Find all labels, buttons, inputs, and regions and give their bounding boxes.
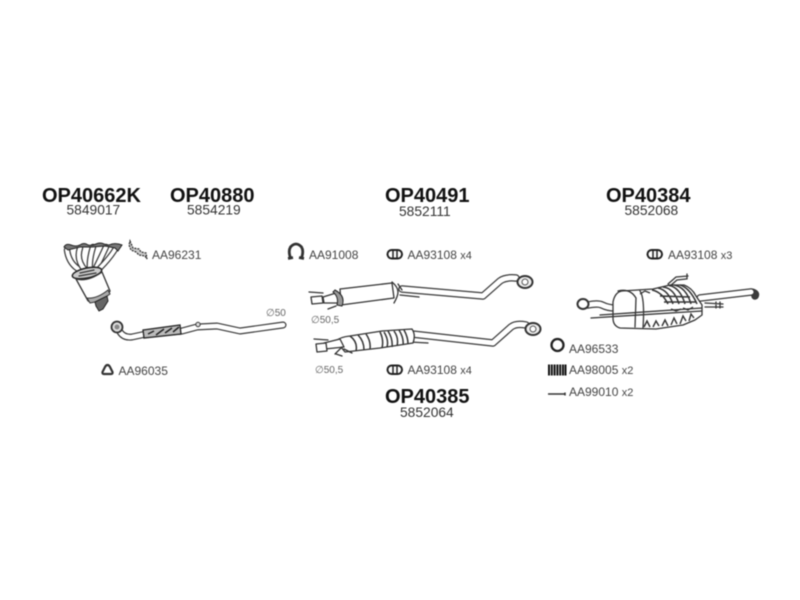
heading: OP40384: 5852068 — [624, 203, 679, 218]
heading: OP40385 — [385, 386, 470, 420]
icon: ring clamp AA93108 lower — [388, 366, 402, 374]
icon: ring clamp AA93108 right — [648, 250, 662, 258]
label: diameter 50,5 upper: ∅50,5 — [311, 315, 340, 326]
icon: spring AA98005 — [549, 364, 566, 376]
heading: OP40880: 5854219 — [187, 202, 241, 218]
icon: middle silencer lower — [314, 323, 540, 356]
label: diameter 50: ∅50 — [266, 308, 286, 319]
icon: triangular seal AA96035 — [102, 365, 113, 374]
heading: OP40385: OP40385 — [385, 386, 470, 408]
icon: bolt AA99010 — [548, 392, 565, 396]
icon: gasket AA96231 — [129, 241, 147, 259]
label: AA93108 x4 lower: AA93108 x4 — [408, 363, 472, 377]
label: AA93108 x3: AA93108 x3 — [668, 248, 732, 262]
label: AA91008: AA91008 — [309, 248, 359, 262]
label: AA99010 x2: AA99010 x2 — [569, 385, 633, 399]
heading: OP40880 — [170, 185, 255, 218]
heading: OP40880: OP40880 — [170, 185, 255, 207]
heading: OP40384 — [606, 185, 691, 218]
heading: OP40662K: OP40662K — [42, 185, 142, 207]
label: AA96035: AA96035 — [118, 364, 168, 378]
heading: OP40385: 5852064 — [400, 405, 454, 420]
label: AA93108 x4 upper: AA93108 x4 — [408, 248, 472, 262]
icon: catalytic manifold — [64, 243, 122, 311]
heading: OP40491: OP40491 — [385, 185, 470, 207]
heading: OP40491 — [385, 185, 470, 219]
icon: O-ring AA96533 — [552, 339, 564, 351]
label: AA96231: AA96231 — [152, 248, 202, 262]
icon: clamp AA91008 — [288, 244, 304, 258]
label: AA98005 x2: AA98005 x2 — [569, 363, 633, 377]
heading: OP40662K — [42, 185, 142, 218]
icon: ring clamp AA93108 upper — [388, 250, 402, 258]
label: diameter 50,5 lower: ∅50,5 — [315, 365, 344, 376]
icon: middle silencer upper — [309, 276, 532, 309]
icon: rear silencer — [578, 274, 756, 329]
heading: OP40491: 5852111 — [399, 204, 451, 219]
icon: front pipe — [112, 322, 283, 338]
heading: OP40662K: 5849017 — [66, 202, 120, 218]
heading: OP40384: OP40384 — [606, 185, 691, 207]
label: AA96533: AA96533 — [569, 342, 619, 356]
